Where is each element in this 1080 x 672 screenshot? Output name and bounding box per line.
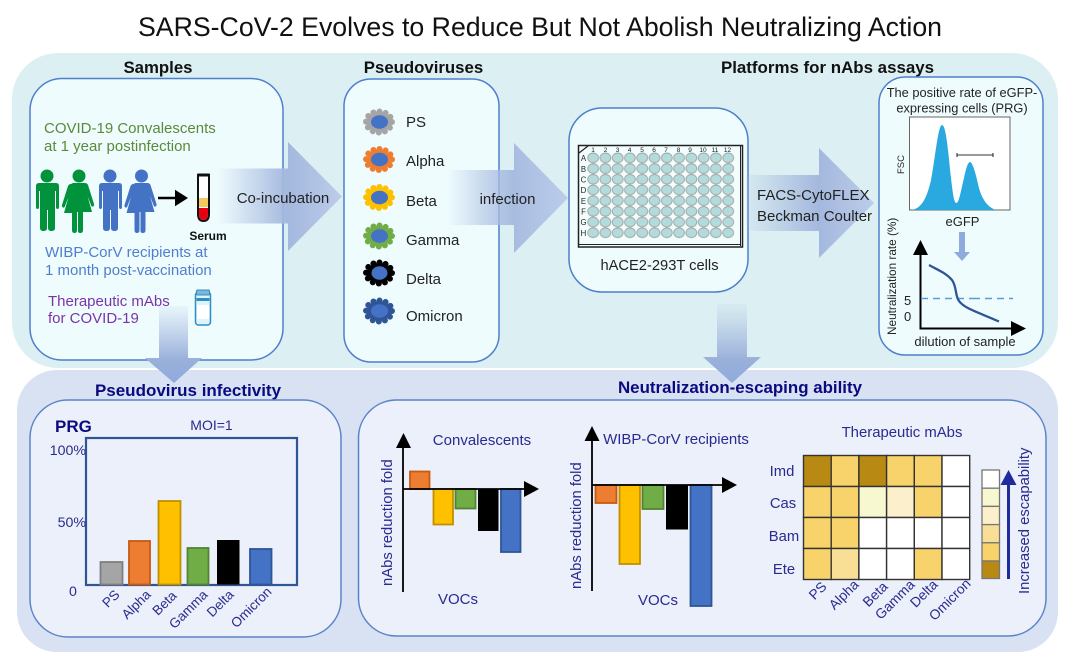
icon: 96-well plate: H bbox=[581, 229, 586, 238]
label: Omicron: Omicron bbox=[406, 308, 463, 325]
label: serum: Serum bbox=[189, 229, 227, 243]
text: therapeutic mAbs: for COVID-19 bbox=[48, 310, 139, 327]
icon: Beta virus bbox=[366, 187, 392, 208]
labels: variants: Delta bbox=[204, 587, 237, 620]
icon: 96-well plate bbox=[578, 146, 742, 247]
label: y tick 50%: 50% bbox=[58, 515, 86, 531]
bar chart: infectivity bbox=[86, 438, 297, 585]
icon: 96-well plate: 1 bbox=[591, 147, 595, 154]
icon: 96-well plate: D bbox=[581, 186, 587, 195]
text: PRG caption: The positive rate of eGFP- bbox=[887, 85, 1037, 100]
icon: man green bbox=[36, 170, 59, 231]
label: Gamma: Gamma bbox=[406, 232, 460, 249]
icon: 96-well plate: 5 bbox=[640, 147, 644, 154]
label: co-incubation: Co-incubation bbox=[237, 190, 329, 207]
panel: pseudoviruses bbox=[344, 79, 499, 362]
icon: woman green bbox=[62, 170, 94, 233]
chart: neutralization curve bbox=[913, 240, 1026, 336]
label: y tick 0: 0 bbox=[69, 584, 77, 600]
arrow: co-incubation bbox=[217, 142, 342, 251]
label: Convalescents: Convalescents bbox=[433, 432, 531, 449]
panel: pseudovirus infectivity bbox=[30, 400, 341, 637]
text: therapeutic mAbs: Therapeutic mAbs bbox=[48, 293, 170, 310]
icon: serum tube bbox=[197, 174, 210, 221]
heading: Pseudoviruses: Pseudoviruses bbox=[364, 58, 483, 77]
chart: convalescents bbox=[380, 432, 539, 608]
arrow: to serum tube bbox=[158, 190, 188, 206]
icon: 96-well plate: 10 bbox=[699, 147, 707, 154]
icon: 96-well plate: E bbox=[581, 197, 586, 206]
arrow: infection bbox=[447, 143, 568, 253]
legend: escapability scale bbox=[982, 470, 1000, 578]
label: FACS platform: FACS-CytoFLEX bbox=[757, 187, 870, 204]
label: PS: PS bbox=[406, 114, 426, 131]
labels: variants bbox=[99, 584, 275, 632]
icon: 96-well plate: 7 bbox=[664, 147, 668, 154]
panel: cells plate bbox=[569, 108, 748, 292]
icon: 96-well plate: G bbox=[580, 218, 587, 227]
arrow: assays down to neutralization bbox=[703, 304, 761, 383]
arrow: small down bbox=[954, 232, 970, 261]
labels: heatmap variants: Delta bbox=[907, 577, 941, 610]
labels: variants: PS bbox=[99, 587, 123, 610]
label: MOI=1: MOI=1 bbox=[190, 417, 233, 433]
label: y axis: nAbs reduction fold bbox=[380, 459, 396, 586]
label: increased escapability: Increased escapability bbox=[1017, 447, 1033, 594]
icon: 96-well plate: 9 bbox=[688, 147, 692, 154]
label: FSC: FSC bbox=[896, 155, 907, 174]
icon: 96-well plate: 4 bbox=[628, 147, 632, 154]
panel: top workflow background bbox=[12, 53, 1058, 368]
labels: mAbs: Cas bbox=[770, 496, 796, 512]
labels: variants: Gamma bbox=[166, 587, 211, 632]
label: y tick 100%: 100% bbox=[50, 443, 86, 459]
label: WIBP-CorV recipients: WIBP-CorV recipients bbox=[603, 431, 749, 448]
label: infection: infection bbox=[480, 191, 535, 208]
panel: PRG assay bbox=[879, 77, 1043, 355]
labels: heatmap variants: PS bbox=[806, 579, 830, 603]
icon: 96-well plate: F bbox=[581, 208, 586, 216]
label: PRG: PRG bbox=[55, 417, 92, 436]
icon: 96-well plate: A bbox=[581, 154, 587, 163]
icon: PS virus bbox=[366, 112, 392, 132]
labels: mAbs: Bam bbox=[769, 529, 799, 545]
text: WIBP-CorV recipients: WIBP-CorV recipients at bbox=[45, 244, 208, 261]
heading: Neutralization-escaping ability: Neutralization-escaping ability bbox=[618, 378, 863, 397]
label: VOCs: VOCs bbox=[438, 591, 478, 608]
icon: vial bbox=[196, 290, 210, 325]
label: FACS platform: Beckman Coulter bbox=[757, 208, 872, 225]
icon: 96-well plate: 2 bbox=[604, 147, 608, 154]
arrow: FACS platform bbox=[746, 148, 874, 258]
label: y axis: nAbs reduction fold bbox=[569, 462, 585, 589]
text: PRG caption: expressing cells (PRG) bbox=[896, 100, 1028, 116]
labels: variants: Alpha bbox=[119, 587, 154, 622]
label: Therapeutic mAbs: Therapeutic mAbs bbox=[842, 425, 962, 441]
icon: Delta virus bbox=[366, 262, 392, 284]
label: neutralization rate axis: Neutralization rate (%) bbox=[885, 218, 899, 335]
labels: mAbs bbox=[769, 464, 799, 578]
icon: 96-well plate: 11 bbox=[712, 147, 719, 154]
arrow: samples down to infectivity bbox=[145, 306, 202, 383]
icon: Omicron virus bbox=[366, 300, 392, 322]
chart: FACS histogram bbox=[910, 117, 1010, 210]
labels: heatmap variants: Beta bbox=[860, 579, 891, 610]
arrow: increased escapability bbox=[1000, 470, 1016, 579]
heading: Samples: Samples bbox=[123, 58, 193, 77]
labels: mAbs: Ete bbox=[773, 562, 795, 578]
icon: 96-well plate: 12 bbox=[724, 147, 731, 154]
labels: heatmap variants: Alpha bbox=[826, 577, 862, 613]
icon: 96-well plate: C bbox=[581, 176, 587, 184]
text: convalescents: COVID-19 Convalescents bbox=[44, 120, 216, 137]
panel: bottom results background bbox=[17, 370, 1058, 652]
title: SARS-CoV-2 Evolves to Reduce But Not Abolish Neutralizing Action bbox=[138, 12, 942, 42]
label: hACE2-293T cells: hACE2-293T cells bbox=[600, 258, 719, 274]
icon: 96-well plate: 3 bbox=[616, 147, 620, 154]
heatmap: therapeutic mAbs bbox=[804, 456, 970, 580]
icon: Gamma virus bbox=[366, 226, 392, 246]
text: convalescents: at 1 year postinfection bbox=[44, 138, 191, 155]
icon: 96-well plate: 6 bbox=[652, 147, 656, 154]
chart: WIBP-CorV recipients bbox=[569, 426, 749, 609]
heading: Platforms for nAbs assays: Platforms for nAbs assays bbox=[721, 58, 934, 77]
icon: woman blue bbox=[124, 170, 157, 233]
label: axis tick 0: 0 bbox=[904, 309, 911, 324]
labels: mAbs: Imd bbox=[770, 464, 794, 480]
labels: heatmap variants: Gamma bbox=[872, 577, 918, 622]
label: dilution of sample: dilution of sample bbox=[914, 334, 1016, 349]
labels: heatmap variants: Omicron bbox=[926, 576, 974, 623]
labels: heatmap variants bbox=[806, 576, 974, 623]
heading: Pseudovirus infectivity: Pseudovirus infectivity bbox=[95, 381, 282, 400]
icon: man blue bbox=[99, 170, 122, 231]
icon: 96-well plate: 8 bbox=[677, 147, 681, 154]
label: VOCs: VOCs bbox=[638, 592, 678, 609]
icon: 96-well plate: B bbox=[581, 165, 586, 174]
labels: variants: Omicron bbox=[228, 584, 275, 631]
label: Beta: Beta bbox=[406, 193, 438, 210]
panel: neutralization-escaping ability bbox=[358, 400, 1046, 636]
labels: variants: Beta bbox=[149, 588, 180, 618]
text: WIBP-CorV recipients: 1 month post-vaccination bbox=[45, 262, 212, 279]
icon: Alpha virus bbox=[366, 149, 392, 170]
label: Alpha: Alpha bbox=[406, 153, 445, 170]
label: eGFP: eGFP bbox=[946, 214, 979, 229]
panel: samples bbox=[30, 78, 283, 360]
label: axis tick 5: 5 bbox=[904, 293, 911, 308]
label: Delta: Delta bbox=[406, 271, 442, 288]
